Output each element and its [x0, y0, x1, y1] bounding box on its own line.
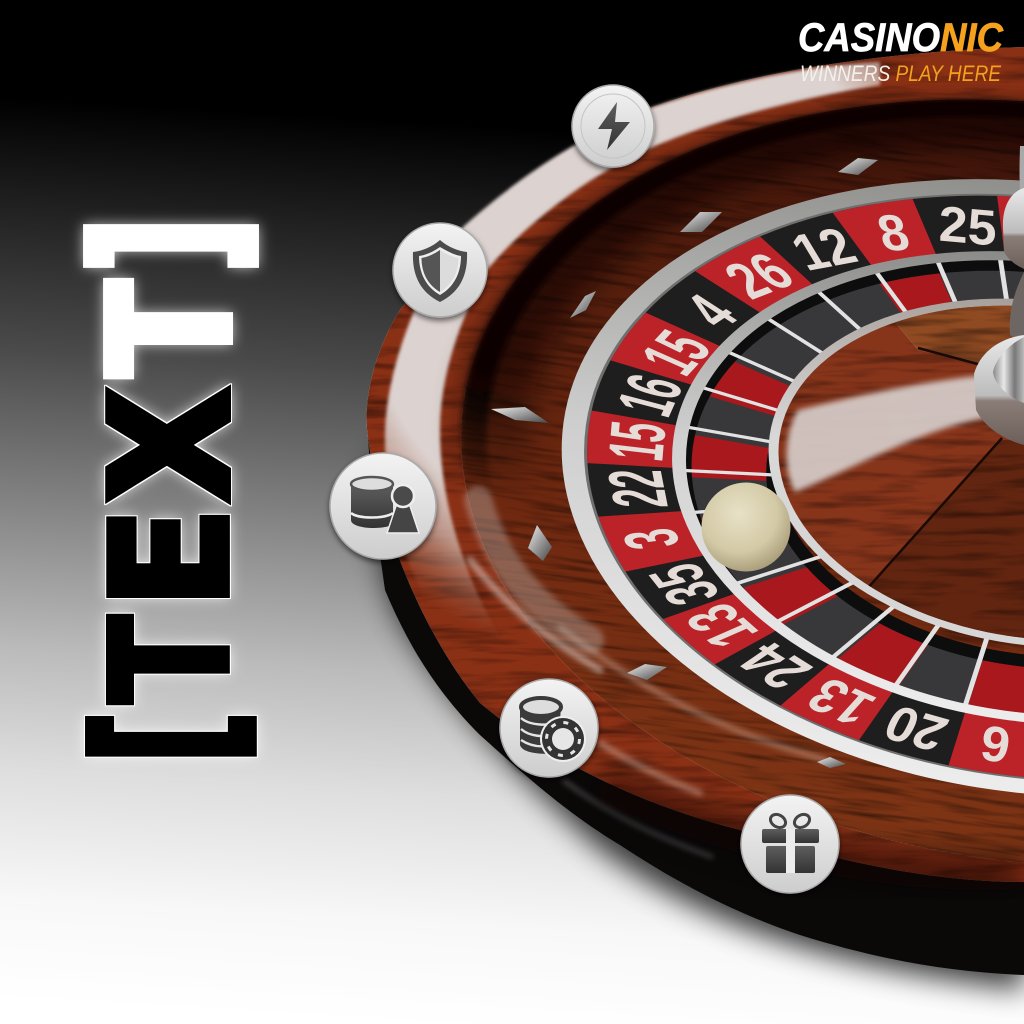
icon button: lightning — [572, 85, 654, 167]
centre hub — [974, 146, 1024, 445]
vertical title: T — [76, 615, 266, 704]
hub stem — [1010, 272, 1024, 345]
base highlight — [563, 780, 713, 857]
wooden bowl — [411, 27, 1024, 939]
table shadow — [372, 300, 1024, 990]
numbers: 13 — [795, 667, 888, 735]
wooden rim — [367, 47, 1024, 882]
numbers: 12 — [781, 218, 867, 282]
icon button: chips — [500, 679, 598, 777]
icon button: gift — [741, 795, 839, 893]
vertical title: [ — [60, 711, 272, 764]
numbers: 15 — [625, 321, 728, 385]
number ring — [416, 45, 1024, 931]
centre cone — [768, 298, 1024, 645]
rim highlights — [470, 500, 827, 793]
logo: WINNERS PLAY HERE — [800, 61, 1001, 86]
numbers: 20 — [875, 695, 956, 762]
numbers: 22 — [591, 470, 685, 507]
wheel base — [368, 300, 1024, 975]
numbers: 15 — [592, 417, 682, 465]
logo — [798, 16, 1004, 86]
numbers: 26 — [710, 242, 808, 310]
vertical title: E — [79, 508, 264, 608]
reflection — [787, 375, 985, 492]
numbers: 16 — [600, 367, 700, 424]
logo: CASINONIC — [798, 16, 1004, 60]
numbers: 8 — [871, 204, 915, 261]
wheel body, in tilted wheel coordinates — [411, 27, 1024, 939]
numbers: 6 — [977, 714, 1014, 774]
numbers: 4 — [669, 284, 754, 339]
upper wood sector — [895, 306, 1013, 363]
hub base — [974, 335, 1024, 445]
vertical title: X — [78, 388, 266, 502]
rim studs — [491, 158, 878, 768]
numbers: 25 — [938, 195, 997, 256]
hub cap — [1003, 188, 1024, 269]
finial — [1020, 146, 1024, 190]
numbers: 24 — [726, 633, 826, 698]
numbers: 3 — [607, 524, 697, 553]
numbers: 35 — [633, 556, 737, 612]
icon button: shield — [393, 223, 487, 317]
seams — [866, 348, 1002, 590]
icon button: database and pawn — [330, 453, 436, 559]
bowl lip — [425, 38, 1024, 928]
bowl shadow — [447, 55, 1024, 911]
numbers — [554, 149, 1024, 774]
vertical title — [58, 218, 273, 764]
pale rim reflection — [385, 62, 880, 655]
vertical title: ] — [58, 218, 273, 272]
numbers: 13 — [669, 595, 773, 657]
vertical title: T — [73, 280, 270, 377]
hub neck — [993, 337, 1024, 403]
ball — [702, 482, 790, 572]
rim lower shading — [600, 785, 1024, 873]
pocket dividers — [649, 215, 1024, 710]
darker wood sector — [870, 440, 1024, 638]
pocket track — [566, 159, 1024, 829]
silver rings — [534, 129, 1024, 847]
